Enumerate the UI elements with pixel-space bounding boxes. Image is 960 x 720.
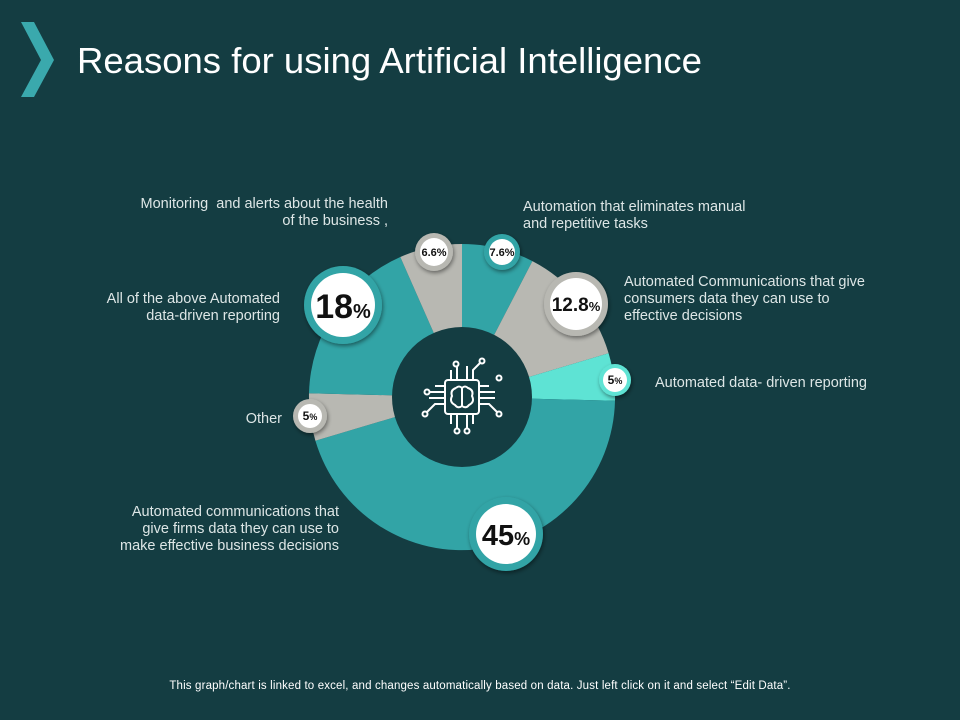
label: automated communications firms: Automated communications that — [132, 504, 339, 520]
label: automation: Automation that eliminates manual — [523, 199, 745, 215]
label: monitoring — [141, 196, 388, 229]
badges: 18% — [315, 288, 371, 326]
badges — [293, 233, 631, 571]
label: automated data-driven reporting: Automated data- driven reporting — [655, 375, 867, 391]
label: automated communications consumers: Automated Communications that give — [624, 274, 865, 290]
label: automated communications consumers: effective decisions — [624, 308, 742, 324]
badges: 5% — [608, 373, 622, 387]
icon: AI chip brain — [422, 358, 502, 434]
label: automated communications firms: make effective business decisions — [120, 538, 339, 554]
label: automated communications firms — [120, 504, 339, 554]
label: automated communications consumers — [624, 274, 865, 324]
label: all of the above — [106, 291, 280, 324]
label: all of the above: data-driven reporting — [146, 308, 280, 324]
badges: 6.6% — [421, 247, 447, 259]
label: other: Other — [246, 411, 282, 427]
title: Reasons for using Artificial Intelligence — [77, 40, 702, 81]
badges: 12.8% — [552, 295, 601, 316]
icon: chevron — [21, 22, 54, 97]
label: automated communications firms: give firms data they can use to — [142, 521, 339, 537]
badges: 45% — [482, 520, 530, 552]
badges: 5% — [303, 409, 317, 423]
badges: 7.6% — [489, 247, 515, 259]
label: automation: and repetitive tasks — [523, 216, 648, 232]
footnote: This graph/chart is linked to excel, and changes automatically based on data. Just left click on it and select “Edit Data”. — [169, 680, 791, 692]
label: monitoring: Monitoring and alerts about the health — [141, 196, 388, 212]
label: all of the above: All of the above Automated — [107, 291, 280, 307]
label: automation — [523, 199, 745, 232]
label: monitoring: of the business , — [282, 213, 388, 229]
label: automated communications consumers: consumers data they can use to — [624, 291, 830, 307]
